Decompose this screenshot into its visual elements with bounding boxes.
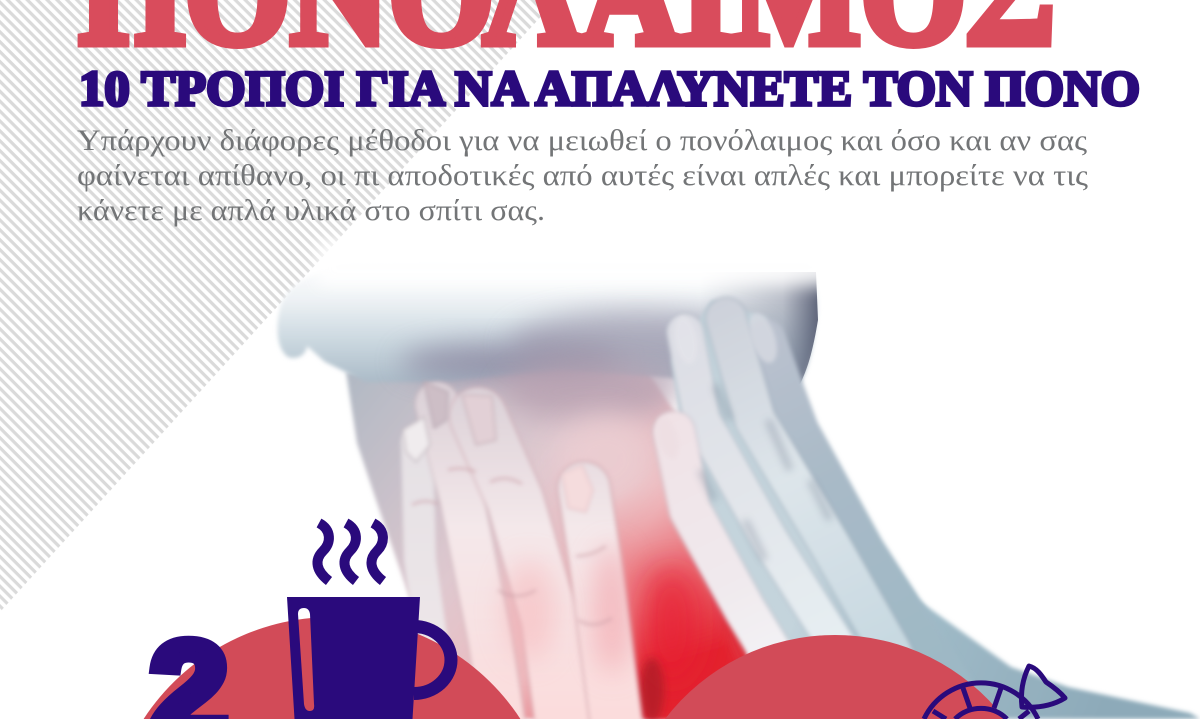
right hand nails bbox=[653, 310, 782, 462]
icon: steaming mug bbox=[287, 523, 451, 719]
left hand fingers bbox=[417, 404, 618, 719]
intro text: φαίνεται απίθανο, οι πι αποδοτικές από αυτές είναι απλές και μπορείτε να τις bbox=[77, 159, 1088, 192]
neck skin glow bbox=[555, 415, 655, 505]
finger three bbox=[478, 416, 565, 719]
mug handle bbox=[414, 626, 451, 694]
right hand fingers bbox=[674, 318, 985, 719]
finger D bbox=[674, 432, 800, 700]
subtitle: 10 ΤΡΟΠΟΙ ΓΙΑ ΝΑ ΑΠΑΛΥΝΕΤΕ ΤΟΝ ΠΟΝΟ bbox=[79, 60, 1140, 116]
steam bbox=[317, 523, 383, 581]
soft top fade bbox=[318, 240, 838, 286]
mug body bbox=[287, 597, 420, 719]
intro text: Υπάρχουν διάφορες μέθοδοι για να μειωθεί ο πονόλαιμος και όσο και αν σας bbox=[77, 124, 1087, 157]
intro text: κάνετε με απλά υλικά στο σπίτι σας. bbox=[77, 194, 545, 227]
finger one bbox=[417, 442, 445, 719]
red circle left bbox=[144, 617, 520, 719]
finger redness and creases bbox=[412, 468, 632, 674]
neck bbox=[346, 360, 760, 719]
right hand creases bbox=[700, 385, 830, 560]
finger A bbox=[685, 332, 880, 719]
neck photo illustration bbox=[277, 240, 1200, 719]
head and chin bbox=[277, 256, 818, 384]
arm and palm base bbox=[672, 300, 1200, 719]
icon: candy bbox=[924, 666, 1065, 719]
red circle right bbox=[665, 635, 1005, 719]
inflamed red area bbox=[612, 470, 745, 719]
finger nails bbox=[403, 382, 593, 512]
finger C bbox=[766, 338, 985, 719]
striped background triangle bbox=[0, 0, 556, 612]
finger four bbox=[584, 488, 618, 719]
finger B bbox=[726, 318, 930, 719]
chin to neck blend bbox=[500, 362, 680, 422]
finger two bbox=[437, 404, 505, 719]
intro text bbox=[77, 124, 1088, 227]
